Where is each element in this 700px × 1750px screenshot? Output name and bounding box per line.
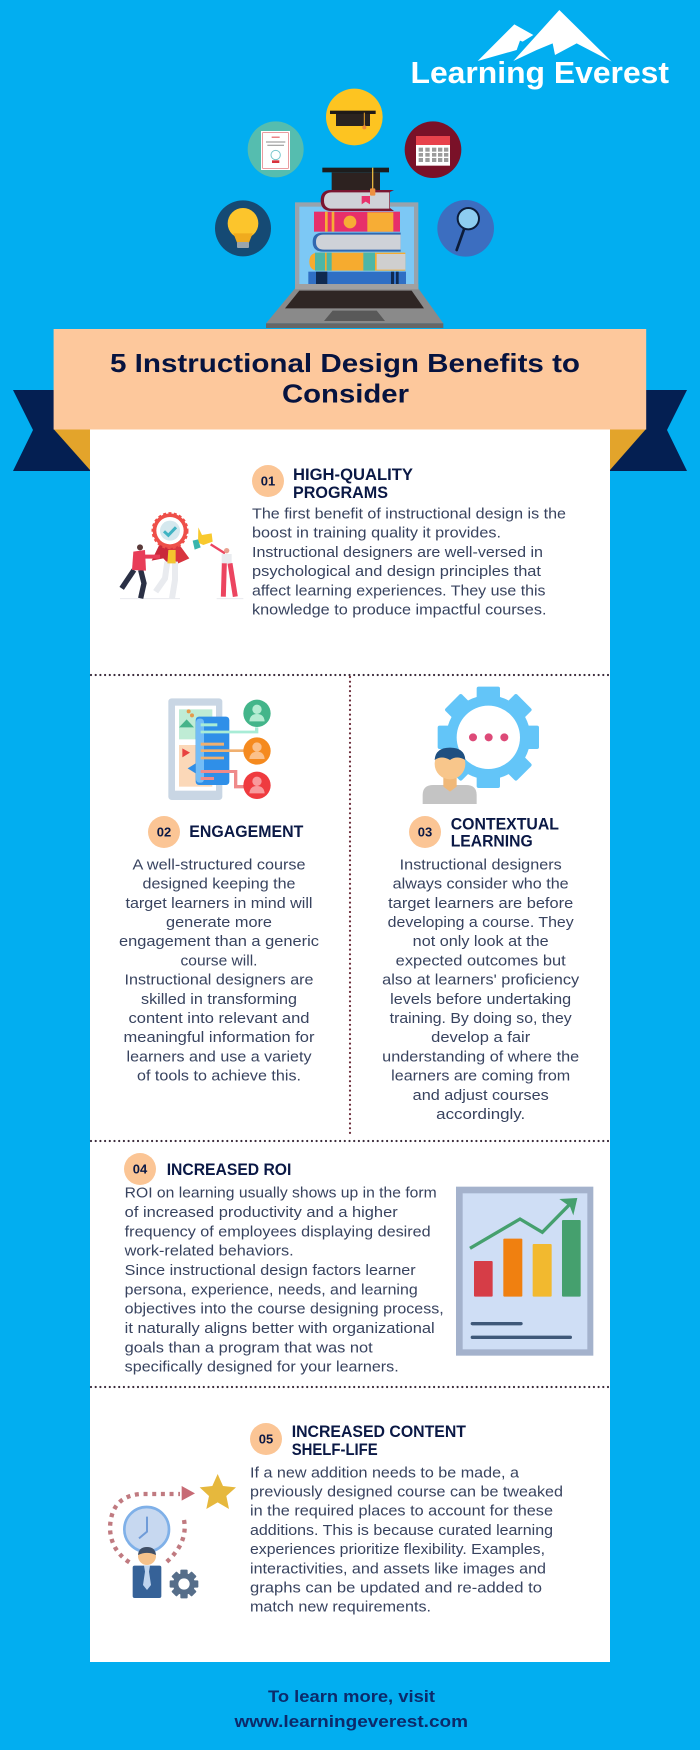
white content card [90,429,610,1662]
body text 02: A well-structured course [132,857,306,873]
body text 03: also at learners' proficiency [382,973,580,989]
chart icon: rising bars with arrow [456,1187,593,1356]
footer: call to action: www.learningeverest.com [233,1712,468,1731]
number badge 02: 02 [157,824,171,840]
title banner [54,329,646,430]
body text 03: accordingly. [436,1107,525,1123]
icon: graduation cap [326,89,383,145]
heading 04: INCREASED ROI [167,1161,291,1179]
body text 02: course will. [180,953,258,969]
icon: magnifier [437,200,494,257]
body text 03: understanding of where the [382,1049,579,1065]
heading 01 [293,466,413,502]
body text 05: interactivities, and assets like images and [250,1561,546,1577]
body text 04: Since instructional design factors learner [125,1263,416,1279]
icon: calendar [405,121,461,178]
body text 02: Instructional designers are [124,973,314,989]
panel: 04 increased ROI [124,1153,593,1376]
number badge 04: 04 [133,1162,148,1176]
body text 02: meaningful information for [124,1030,315,1046]
illustration: person with gear [423,687,539,804]
body text 04: objectives into the course designing process, [125,1302,444,1318]
body text 03: training. By doing so, they [390,1011,573,1027]
heading 03: LEARNING [451,833,533,851]
icon: certificate [248,121,304,177]
body text 04: frequency of employees displaying desired [125,1224,431,1240]
body text 03: levels before undertaking [390,992,571,1008]
body text 04: goals than a program that was not [125,1340,373,1356]
body text 01: affect learning experiences. They use this [252,583,546,599]
ribbon tail: left [13,390,90,471]
body text 02: content into relevant and [128,1011,310,1027]
body text 05: graphs can be updated and re-added to [250,1580,542,1596]
number badge 03: 03 [418,824,432,840]
body text 04: of increased productivity and a higher [125,1205,398,1221]
panel: 01 high-quality programs [120,465,566,618]
divider [91,674,610,676]
body text 03 [382,857,580,1123]
number badge 01 [252,465,284,497]
heading 05 [292,1423,466,1459]
panel: 05 increased content shelf-life [110,1423,563,1616]
body text 04: persona, experience, needs, and learning [125,1282,418,1298]
body text 05 [250,1465,563,1616]
body text 03: Instructional designers [400,857,562,873]
body text 04: work-related behaviors. [124,1244,294,1260]
body text 03: target learners are before [388,896,573,912]
body text 03: not only look at the [413,934,549,950]
body text 04: specifically designed for your learners. [125,1360,399,1376]
ribbon fold: right [610,429,646,470]
title banner: 5 Instructional Design Benefits to [110,348,580,378]
ribbon tail: right [610,390,687,471]
illustration: person with clock, star and gear [110,1474,236,1598]
body text 02: skilled in transforming [141,992,297,1008]
body text 02 [119,857,319,1085]
body text 02: designed keeping the [142,877,296,893]
body text 02: learners and use a variety [126,1049,312,1065]
panel: 02 engagement [119,698,319,1085]
body text 03: and adjust courses [413,1088,549,1104]
heading 05: INCREASED CONTENT [292,1423,466,1441]
logo: Learning Everest [410,10,669,90]
illustration: tablet with chat and users [168,698,271,800]
number badge 03 [409,816,441,848]
panel: 03 contextual learning [382,687,580,1123]
number badge 05: 05 [259,1432,273,1446]
heading 03: CONTEXTUAL [451,815,559,833]
body text 04: it naturally aligns better with organizational [125,1321,435,1337]
body text 05: previously designed course can be tweaked [250,1484,563,1500]
icon: light bulb [215,200,271,256]
heading 02: ENGAGEMENT [189,823,303,841]
illustration: laptop with book stack [266,168,443,328]
heading 01: HIGH-QUALITY [293,466,413,484]
body text 01: knowledge to produce impactful courses. [252,602,546,618]
body text 05: experiences prioritize flexibility. Examples, [250,1542,545,1558]
title banner: Consider [282,378,409,408]
heading 05: SHELF-LIFE [292,1441,378,1459]
body text 02: generate more [166,915,272,931]
heading 01: PROGRAMS [293,484,388,502]
body text 02: of tools to achieve this. [137,1069,301,1085]
body text 02: target learners in mind will [126,896,312,912]
body text 03: always consider who the [393,877,569,893]
footer: call to action [233,1687,468,1731]
footer: call to action: To learn more, visit [268,1687,435,1706]
number badge 04 [124,1153,156,1185]
ribbon fold: left [54,429,90,470]
body text 05: If a new addition needs to be made, a [250,1465,520,1481]
body text 03: expected outcomes but [396,953,566,969]
body text 03: developing a course. They [388,915,575,931]
divider [91,1386,610,1388]
body text 05: additions. This is because curated learning [250,1523,553,1539]
body text 04: ROI on learning usually shows up in the form [125,1186,437,1202]
body text 05: match new requirements. [250,1600,431,1616]
body text 01: boost in training quality it provides. [252,526,501,542]
number badge 05 [250,1423,282,1455]
body text 04 [124,1186,444,1376]
body text 01: The first benefit of instructional design is the [252,506,566,522]
body text 01: Instructional designers are well-versed in [252,545,543,561]
body text 01: psychological and design principles that [252,564,541,580]
body text 01 [252,506,566,618]
body text 03: learners are coming from [391,1069,570,1085]
body text 02: engagement than a generic [119,934,319,950]
number badge 01: 01 [261,474,275,488]
number badge 02 [148,816,180,848]
body text 03: develop a fair [431,1030,530,1046]
logo: Learning Everest: Learning Everest [410,55,669,90]
divider [91,1140,610,1142]
divider vertical [349,677,351,1133]
illustration: team with award rosette and thumbs up [120,513,243,599]
heading 03 [451,815,559,851]
body text 05: in the required places to account for these [250,1504,553,1520]
